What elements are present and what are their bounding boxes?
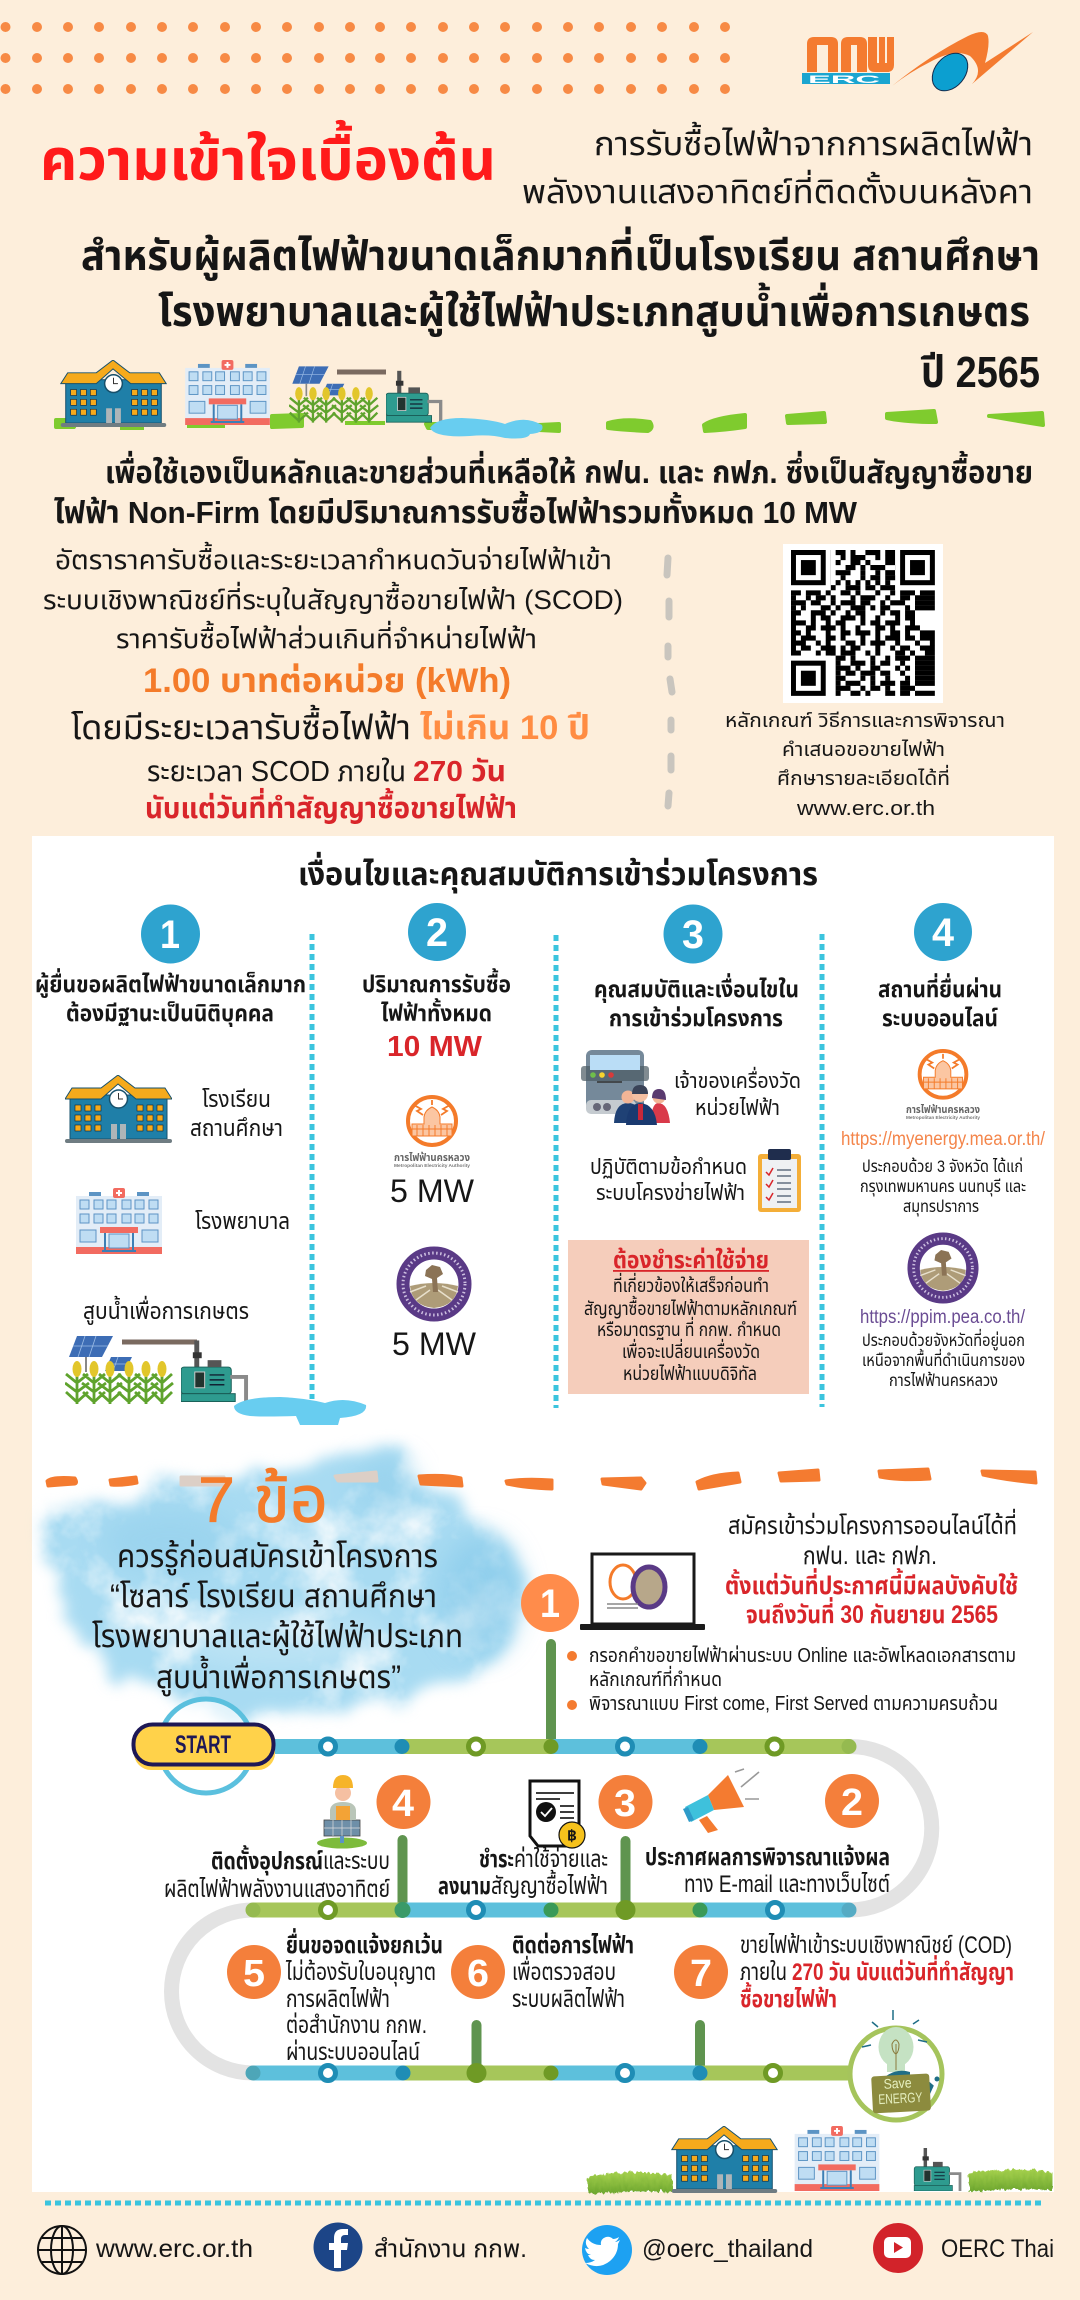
text: PEA area: ประกอบด้วยจังหวัดที่อยู่นอก <box>862 1328 1025 1352</box>
column 1 heading: ผู้ยื่นขอผลิตไฟฟ้าขนาดเล็กมาก <box>35 968 306 998</box>
subtitle: right aligned lines <box>522 121 1033 210</box>
step connector: vertical stems <box>402 1644 700 2073</box>
text: rate and SCOD <box>43 541 623 825</box>
text: 5 MW: 5 MW <box>392 1326 477 1362</box>
text: rate and SCOD: ราคารับซื้อไฟฟ้าส่วนเกินที่จำหน่ายไฟฟ้า <box>116 620 537 654</box>
text: pay and sign: สัญญาซื้อไฟฟ้า <box>491 1869 608 1900</box>
column 2 heading: ปริมาณการรับซื้อ <box>362 968 511 997</box>
dotted column dividers <box>312 934 822 1408</box>
text: campaign title <box>92 1538 463 1697</box>
step 2 <box>645 1769 890 1898</box>
footer dotted rule <box>45 2200 1043 2206</box>
watercolor blob <box>38 1448 525 1720</box>
step 3 badge <box>598 1775 652 1829</box>
text: install <box>164 1845 390 1903</box>
column 4 heading <box>878 973 1002 1031</box>
panel: column 4 <box>841 903 1046 1390</box>
step 5 badge <box>227 1945 281 1999</box>
decorative dot grid <box>0 22 730 94</box>
text: QR caption: คำเสนอขอขายไฟฟ้า <box>782 739 945 761</box>
text: commercial operation: 270 วัน นับแต่วันที่ทำสัญญา <box>792 1955 1014 1986</box>
icon: puddle <box>234 1397 366 1425</box>
icon: hospital (bottom) <box>795 2126 879 2191</box>
text: apply online: ตั้งแต่วันที่ประกาศนี้มีผลบังคับใช้ <box>725 1568 1018 1600</box>
column 4 heading: สถานที่ยื่นผ่าน <box>878 973 1002 1002</box>
logo: PEA <box>403 1253 465 1315</box>
text: rate and SCOD: ไม่เกิน 10 ปี <box>420 709 590 747</box>
icon: solar panels and crops (header) <box>289 366 386 423</box>
QR code <box>783 544 943 703</box>
column 2 heading <box>362 968 511 1063</box>
column 3 heading: คุณสมบัติและเงื่อนไขใน <box>594 973 799 1003</box>
text: install: และระบบ <box>323 1848 390 1875</box>
number badge 3 <box>664 904 722 964</box>
text: campaign title: “โซลาร์ โรงเรียน สถานศึกษา <box>110 1578 437 1614</box>
step 2 badge: 2 <box>841 1782 863 1824</box>
heading: 7 points: 7 ข้อ <box>198 1464 328 1536</box>
icon: pump <box>181 1340 246 1402</box>
start button: START <box>175 1731 231 1759</box>
icon: save energy badge <box>850 2010 942 2120</box>
icon: contract with coin <box>530 1781 585 1848</box>
callout: fee notice: ต้องชำระค่าใช้จ่าย <box>613 1246 769 1274</box>
number badge 1 <box>141 904 200 964</box>
column 2 heading: ไฟฟ้าทั้งหมด <box>381 998 492 1026</box>
icon: save energy badge: Save <box>883 2074 912 2092</box>
footer: website: www.erc.or.th <box>95 2235 253 2263</box>
text: pay and sign: ลงนาม <box>438 1873 491 1900</box>
heading: target group: ปี 2565 <box>920 348 1040 397</box>
icon: hospital <box>76 1188 162 1254</box>
text: grid code: ระบบโครงข่ายไฟฟ้า <box>596 1181 745 1205</box>
step 4 badge <box>376 1775 430 1829</box>
step 6 badge: 6 <box>467 1953 489 1995</box>
text: rate and SCOD: 1.00 บาทต่อหน่วย (kWh) <box>143 662 511 700</box>
timeline: row 3 <box>246 2063 850 2083</box>
divider: grey dashes <box>667 558 672 806</box>
text: exemption: ไม่ต้องรับใบอนุญาต <box>285 1958 436 1987</box>
text: exemption: ยื่นขอจดแจ้งยกเว้น <box>286 1928 443 1959</box>
timeline: row 1 <box>275 1739 856 1754</box>
bullets: หลักเกณฑ์ที่กำหนด <box>589 1665 722 1691</box>
text: commercial operation: ขายไฟฟ้าเข้าระบบเชิงพาณิชย์ (COD) <box>740 1932 1012 1959</box>
callout: fee notice <box>568 1240 809 1394</box>
logo: PEA <box>914 1239 972 1297</box>
icon: school (header) <box>61 360 166 427</box>
text: exemption: การผลิตไฟฟ้า <box>286 1986 390 2013</box>
footer: website <box>38 2226 253 2274</box>
step 6 badge <box>451 1945 505 1999</box>
column 1 heading <box>35 968 306 1027</box>
text: rate and SCOD: ระบบเชิงพาณิชย์ที่ระบุในสัญญาซื้อขายไฟฟ้า (SCOD) <box>43 581 623 616</box>
text: rate and SCOD: โดยมีระยะเวลารับซื้อไฟฟ้า <box>71 704 411 747</box>
text: announce: ทาง E-mail และทางเว็บไซต์ <box>684 1870 890 1898</box>
step 3 badge: 3 <box>614 1783 636 1825</box>
text: announce: ประกาศผลการพิจารณาแจ้งผล <box>645 1843 890 1871</box>
panel: column 1 <box>35 904 366 1425</box>
text: install: ติดตั้งอุปกรณ์ <box>211 1845 323 1876</box>
icon: solar technician <box>317 1775 367 1848</box>
text: scheme description: ไฟฟ้า Non-Firm โดยมีปริมาณการรับซื้อไฟฟ้ารวมทั้งหมด 10 MW <box>54 490 858 530</box>
icon: crops with solar panels <box>65 1336 197 1404</box>
text: QR caption: ศึกษารายละเอียดได้ที่ <box>777 764 950 790</box>
step 7 badge <box>674 1945 728 1999</box>
column 4 heading: ระบบออนไลน์ <box>882 1005 998 1031</box>
footer: facebook: สำนักงาน กกพ. <box>374 2235 527 2263</box>
number badge 4: 4 <box>932 911 955 955</box>
text: commercial operation <box>740 1932 1014 2013</box>
subtitle: right aligned lines: พลังงานแสงอาทิตย์ที่ติดตั้งบนหลังคา <box>522 169 1033 210</box>
text: contact utility <box>512 1931 634 2013</box>
text: campaign title: ควรรู้ก่อนสมัครเข้าโครงการ <box>117 1538 438 1576</box>
text: QR caption <box>725 710 1005 820</box>
panel: column 3 <box>568 904 809 1394</box>
text: commercial operation: ภายใน <box>740 1959 787 1986</box>
column 3 heading: การเข้าร่วมโครงการ <box>609 1005 783 1031</box>
callout: fee notice: หรือมาตรฐาน ที่ กกพ. กำหนด <box>597 1316 781 1341</box>
subtitle: right aligned lines: การรับซื้อไฟฟ้าจากการผลิตไฟฟ้า <box>594 121 1033 162</box>
link: PEA: https://ppim.pea.co.th/ <box>860 1307 1026 1328</box>
number badge 2: 2 <box>426 911 448 955</box>
text: announce <box>645 1843 890 1898</box>
text: apply online: สมัครเข้าร่วมโครงการออนไลน์ได้ที่ <box>728 1508 1017 1540</box>
text: rate and SCOD: ระยะเวลา SCOD ภายใน <box>147 756 406 788</box>
callout: fee notice: ที่เกี่ยวข้องให้เสร็จก่อนทำ <box>613 1272 769 1297</box>
text: exemption: ต่อสำนักงาน กกพ. <box>286 2011 427 2039</box>
text: scheme description: เพื่อใช้เองเป็นหลักและขายส่วนที่เหลือให้ กฟน. และ กฟภ. ซึ่งเป็นสัญญาซื้อขาย <box>105 450 1033 490</box>
text: meter owner: เจ้าของเครื่องวัด <box>674 1066 801 1093</box>
heading: conditions: เงื่อนไขและคุณสมบัติการเข้าร่วมโครงการ <box>298 851 818 893</box>
green dashed ground line <box>56 411 1043 431</box>
heading: target group <box>81 226 1040 397</box>
logo: ERC <box>802 32 1033 98</box>
icon: school (bottom) <box>672 2126 777 2193</box>
icon: clipboard <box>758 1149 801 1212</box>
text: pay and sign <box>438 1845 608 1900</box>
text: pay and sign: ค่าใช้จ่ายและ <box>514 1845 608 1873</box>
step 3 <box>438 1775 652 1900</box>
panel: column 2 <box>362 903 511 1362</box>
text: MEA area <box>860 1156 1026 1217</box>
footer: facebook <box>314 2222 527 2272</box>
text: rate and SCOD: นับแต่วันที่ทำสัญญาซื้อขายไฟฟ้า <box>145 787 517 825</box>
callout: fee notice: เพื่อจะเปลี่ยนเครื่องวัด <box>622 1338 760 1363</box>
icon: save energy badge: ENERGY <box>878 2089 923 2107</box>
text: school label: โรงเรียน <box>202 1086 271 1112</box>
text: rate and SCOD: 270 วัน <box>413 756 506 788</box>
icon: megaphone <box>683 1769 759 1833</box>
title: red heading: ความเข้าใจเบื้องต้น <box>40 119 496 193</box>
icon: pump (bottom) <box>914 2148 960 2191</box>
text: meter owner <box>674 1066 801 1120</box>
text: apply online: กฟน. และ กฟภ. <box>803 1542 937 1570</box>
text: apply online <box>725 1508 1018 1629</box>
text: grid code <box>590 1155 747 1205</box>
icon: hospital (header) <box>185 360 270 425</box>
text: PEA area: การไฟฟ้านครหลวง <box>889 1371 998 1390</box>
text: contact utility: ระบบผลิตไฟฟ้า <box>512 1986 625 2013</box>
text: MEA area: ประกอบด้วย 3 จังหวัด ได้แก่ <box>862 1156 1023 1176</box>
number badge 2 <box>408 903 466 961</box>
text: 5 MW: 5 MW <box>390 1173 475 1209</box>
text: scheme description <box>54 450 1033 530</box>
text: contact utility: ติดต่อการไฟฟ้า <box>512 1931 634 1959</box>
start button <box>134 1699 275 1793</box>
step 1 badge <box>521 1574 579 1632</box>
logo: MEA <box>906 1051 981 1120</box>
text: apply online: จนถึงวันที่ 30 กันยายน 2565 <box>746 1597 998 1629</box>
text: MEA area: กรุงเทพมหานคร นนทบุรี และ <box>860 1177 1026 1197</box>
text: campaign title: สูบน้ำเพื่อการเกษตร” <box>156 1655 401 1697</box>
step 1 badge: 1 <box>540 1582 560 1626</box>
grass right <box>968 2170 1052 2192</box>
text: commercial operation: ซื้อขายไฟฟ้า <box>740 1982 837 2013</box>
callout: fee notice: สัญญาซื้อขายไฟฟ้าตามหลักเกณฑ์ <box>584 1295 797 1320</box>
orange dashed line <box>47 1469 1036 1489</box>
logo: MEA <box>394 1097 471 1168</box>
step 4 <box>164 1775 430 1903</box>
text: campaign title: โรงพยาบาลและผู้ใช้ไฟฟ้าประเภท <box>92 1618 463 1656</box>
step 4 badge: 4 <box>392 1783 414 1825</box>
step 7 <box>674 1932 1014 2013</box>
text: contact utility: เพื่อตรวจสอบ <box>512 1955 616 1986</box>
text: PEA area <box>862 1328 1025 1390</box>
link: MEA: https://myenergy.mea.or.th/ <box>841 1129 1046 1150</box>
logo: ERC: ERC <box>808 74 880 86</box>
text: hospital label: โรงพยาบาล <box>195 1208 290 1234</box>
step 5 <box>227 1928 443 2066</box>
bullets: กรอกคำขอขายไฟฟ้าผ่านระบบ Online และอัพโหลดเอกสารตาม <box>589 1644 1016 1667</box>
text: MEA area: สมุทรปราการ <box>903 1197 979 1217</box>
column 2 heading: 10 MW <box>387 1031 483 1063</box>
text: exemption <box>285 1928 443 2066</box>
step 5 badge: 5 <box>243 1953 265 1995</box>
column 3 heading <box>594 973 799 1031</box>
heading: target group: โรงพยาบาลและผู้ใช้ไฟฟ้าประเภทสูบน้ำเพื่อการเกษตร <box>158 282 1030 337</box>
text: meter owner: หน่วยไฟฟ้า <box>695 1096 780 1120</box>
text: grid code: ปฏิบัติตามข้อกำหนด <box>590 1155 747 1179</box>
text: school label <box>190 1086 283 1141</box>
step 2 badge <box>825 1774 879 1828</box>
icon: meter with people <box>581 1050 670 1125</box>
icon: school <box>65 1075 172 1143</box>
text: rate and SCOD: อัตราราคารับซื้อและระยะเวลากำหนดวันจ่ายไฟฟ้าเข้า <box>55 541 612 575</box>
heading: target group: สำหรับผู้ผลิตไฟฟ้าขนาดเล็กมากที่เป็นโรงเรียน สถานศึกษา <box>81 226 1040 281</box>
text: install: ผลิตไฟฟ้าพลังงานแสงอาทิตย์ <box>164 1876 390 1903</box>
step 6 <box>451 1931 634 2013</box>
column 1 heading: ต้องมีฐานะเป็นนิติบุคคล <box>66 1000 274 1027</box>
step 7 badge: 7 <box>690 1953 712 1995</box>
step 1 <box>521 1508 1018 1715</box>
number badge 1: 1 <box>160 913 180 957</box>
footer: twitter: @oerc_thailand <box>642 2235 813 2263</box>
bullets <box>567 1644 1016 1715</box>
text: water pumping label: สูบน้ำเพื่อการเกษตร <box>83 1295 249 1326</box>
timeline: row 2 <box>246 1900 856 1920</box>
text: PEA area: เหนือจากพื้นที่ดำเนินการของ <box>862 1348 1025 1370</box>
text: QR caption: หลักเกณฑ์ วิธีการและการพิจารณา <box>725 710 1005 732</box>
footer: youtube <box>873 2223 1054 2273</box>
footer: twitter <box>582 2225 813 2275</box>
text: exemption: ผ่านระบบออนไลน์ <box>286 2038 420 2066</box>
grass left <box>587 2172 673 2194</box>
bullets: พิจารณาแบบ First come, First Served ตามความครบถ้วน <box>589 1692 998 1715</box>
timeline: grey curves <box>171 1746 932 2073</box>
text: school label: สถานศึกษา <box>190 1115 283 1141</box>
footer: youtube: OERC Thai <box>941 2235 1054 2263</box>
number badge 4 <box>914 903 972 961</box>
number badge 3: 3 <box>682 913 704 957</box>
text: QR caption: www.erc.or.th <box>796 798 935 820</box>
icon: water pump (header) <box>386 371 441 422</box>
callout: fee notice: หน่วยไฟฟ้าแบบดิจิทัล <box>623 1362 757 1385</box>
icon: laptop <box>580 1554 705 1630</box>
text: pay and sign: ชำระ <box>479 1846 514 1873</box>
icon: water puddle (header) <box>430 418 542 438</box>
icon: contract with coin: ฿ <box>567 1828 577 1845</box>
panel: white content area <box>32 836 1054 2192</box>
